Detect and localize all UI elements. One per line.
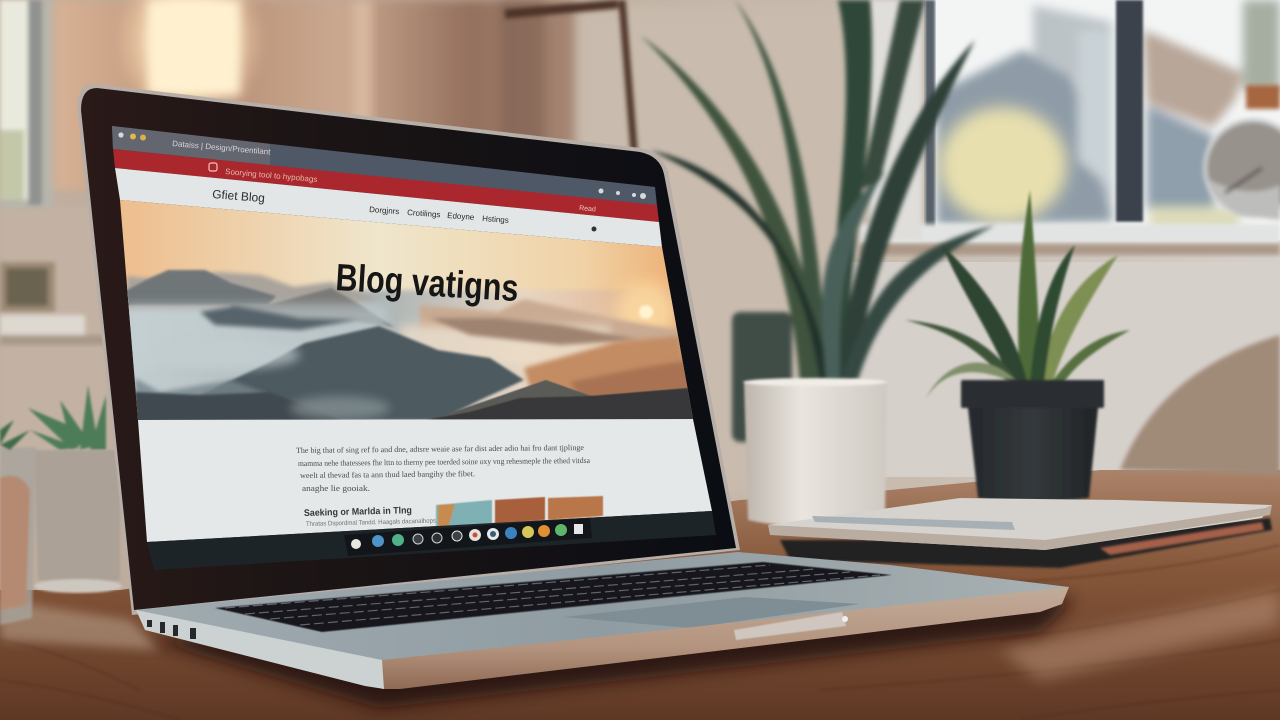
small succulent and pot on left [28,385,122,593]
large central mountain [202,324,525,420]
table [0,470,1280,720]
article paragraph [296,443,590,493]
blog navigation bar: Gfiet Blog [212,187,265,205]
blog navigation bar: Dorgjnrs [369,205,400,216]
centre peak [231,288,394,327]
article subheading: Saeking or Marlda in Tlng [304,505,412,519]
front edge of laptop [382,587,1069,689]
back pale ridges [127,272,380,310]
laptop lid [77,84,740,615]
blog navigation bar: Crotilings [407,208,441,219]
glass jar on far left [0,420,36,625]
blog navigation bar: Hstings [482,214,509,225]
hero title: Blog vatigns [334,257,520,310]
article thumbnails [436,496,603,530]
taskbar icons [351,524,583,549]
article content area [138,419,712,542]
article paragraph: The big that of sing ref fo and dne, adtsre weaie ase far dist ader adio hai fro dant tjplinge [296,443,584,455]
blog navigation bar: Edoyne [447,211,475,222]
article paragraph: mamma nehe thatessees fhe lttn to therny pee toerded soine oxy vng rehesmeple the ethed vitdsa [298,456,590,468]
trackpad [564,597,860,628]
laptop [77,84,1075,708]
laptop base and keyboard deck [136,552,1069,689]
plant: snake plant on right [905,190,1130,400]
right orange ranges [524,336,695,420]
notebooks on the desk [768,498,1272,568]
curtain with sunlight [54,0,574,190]
browser window bar: Dataiss | Design/Proentilant [172,139,272,157]
blog navigation bar [115,168,662,247]
article paragraph: anaghe lie gooiak. [302,484,370,493]
dark foreground with tree line [430,380,696,420]
window: left [0,0,54,208]
chair back right [1120,335,1280,475]
pot: black planter [961,380,1104,502]
article paragraph: weelt al thevad fas ta ann thud laed bangihy the fibet. [300,469,475,480]
wall clock [1203,85,1280,220]
red announcement bar [113,149,659,222]
red announcement bar: Soorying tool to hypobags [225,167,318,184]
side ports [147,620,196,639]
laptop shadow [150,570,1075,708]
red announcement bar: Read [579,205,596,213]
plant: tall behind laptop [640,0,995,442]
chair frame behind laptop [505,0,634,150]
low left hills [135,377,264,412]
hero image: misty mountains [115,195,700,425]
browser window bar [112,126,657,206]
keyboard [215,562,892,632]
shelf and picture on left [0,262,105,345]
article content area: Thratas Dspordmal Tandd. Haagals dacanalhops [306,518,437,528]
pot: white planter [743,378,887,526]
upper left mountain [127,270,276,305]
window: right with blurred house [860,0,1280,255]
OS taskbar [147,511,716,570]
